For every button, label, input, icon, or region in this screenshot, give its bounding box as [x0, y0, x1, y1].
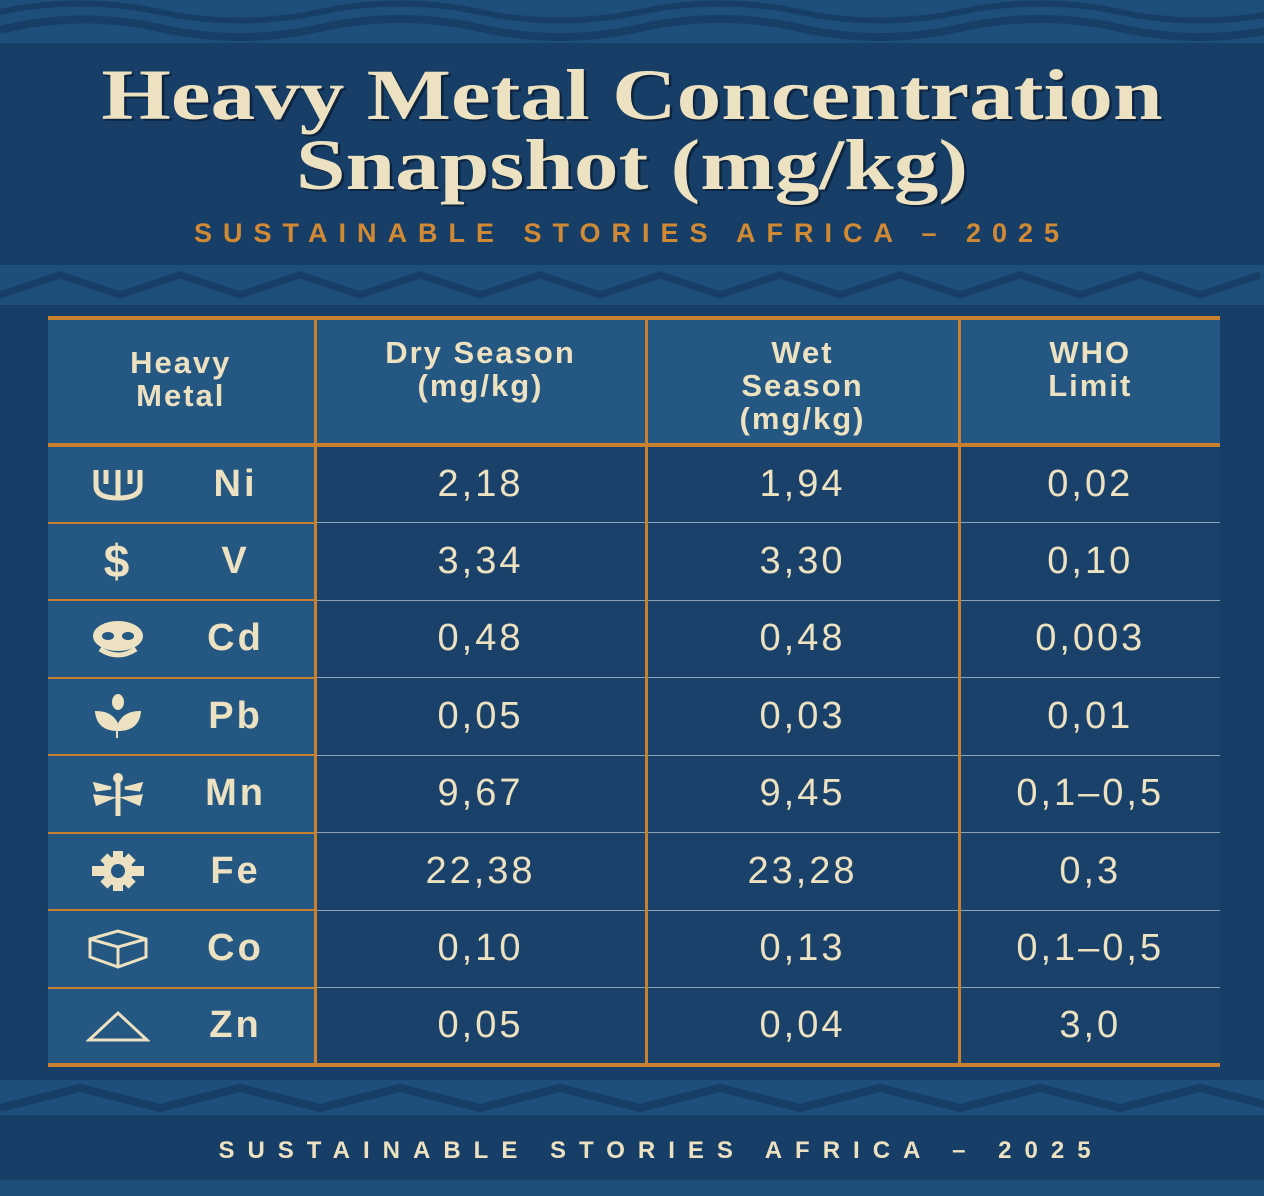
- data table: 0,3: [1059, 850, 1121, 892]
- data table: 0,01: [1047, 695, 1133, 737]
- data table: 3,0: [1059, 1004, 1121, 1046]
- data table: 9,45: [760, 772, 845, 814]
- data table: 0,02: [1047, 463, 1133, 505]
- data table: Pb: [208, 695, 263, 737]
- data table: Season: [741, 368, 864, 403]
- data table: 1,94: [760, 463, 845, 505]
- data table: V: [221, 540, 250, 582]
- data table: WHO: [1049, 335, 1131, 370]
- bottom pattern band: [0, 1080, 1264, 1115]
- data table: 0,10: [438, 927, 523, 969]
- data table: Fe: [210, 850, 261, 892]
- title: Heavy Metal Concentration: [101, 55, 1163, 135]
- top pattern band: [0, 0, 1264, 43]
- data table: 0,05: [438, 695, 523, 737]
- data table: Limit: [1048, 368, 1132, 403]
- data table: 0,04: [760, 1004, 845, 1046]
- data table: Co: [207, 927, 264, 969]
- data table: 2,18: [438, 463, 523, 505]
- title: [101, 55, 1164, 207]
- data table: Heavy: [130, 345, 231, 380]
- footer text: SUSTAINABLE STORIES AFRICA – 2025: [218, 1137, 1104, 1164]
- data table: 3,34: [438, 540, 523, 582]
- data table: Zn: [209, 1004, 262, 1046]
- title: Snapshot (mg/kg): [296, 125, 968, 205]
- data table: Ni: [214, 463, 258, 505]
- data table: Cd: [207, 617, 264, 659]
- data table: 0,48: [760, 617, 845, 659]
- data table: Mn: [205, 772, 266, 814]
- middle pattern band: [0, 265, 1264, 305]
- data table: 0,1–0,5: [1016, 927, 1164, 969]
- data table: Wet: [771, 335, 834, 370]
- subtitle: SUSTAINABLE STORIES AFRICA – 2025: [194, 218, 1070, 248]
- data table: 0,48: [438, 617, 523, 659]
- data table: [48, 316, 1220, 1067]
- data table: 0,03: [760, 695, 845, 737]
- data table: 0,003: [1035, 617, 1145, 659]
- data table: 0,05: [438, 1004, 523, 1046]
- data table: (mg/kg): [418, 368, 543, 403]
- data table: 23,28: [747, 850, 858, 892]
- data table: Metal: [136, 378, 225, 413]
- data table: 3,30: [760, 540, 845, 582]
- bottom edge band: [0, 1180, 1264, 1196]
- data table: (mg/kg): [740, 401, 865, 436]
- data table: 0,1–0,5: [1016, 772, 1164, 814]
- data table: 0,13: [760, 927, 845, 969]
- data table: Dry Season: [385, 335, 576, 370]
- data table: $: [104, 535, 132, 587]
- data table: 9,67: [438, 772, 523, 814]
- data table: 22,38: [425, 850, 536, 892]
- data table: 0,10: [1047, 540, 1133, 582]
